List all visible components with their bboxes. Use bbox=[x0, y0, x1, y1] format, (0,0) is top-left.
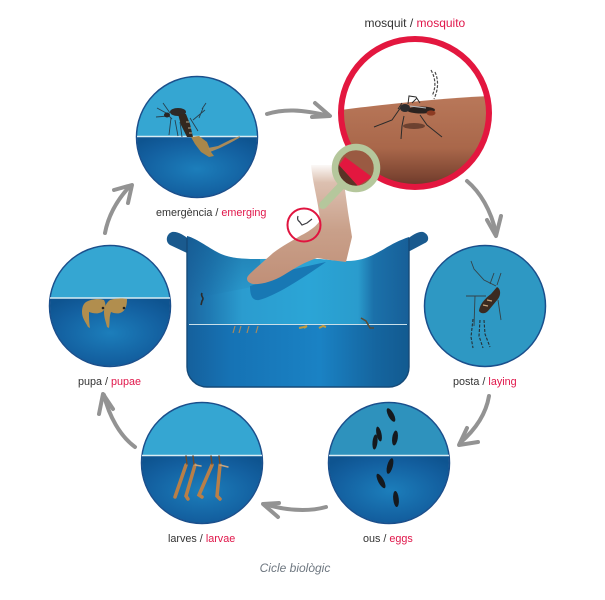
icon: small magnifier circle bbox=[288, 208, 320, 242]
panel: water tub bbox=[167, 232, 428, 387]
icon: pupae bbox=[82, 298, 127, 328]
finger shadow bbox=[250, 262, 326, 300]
water surface line bbox=[189, 324, 407, 326]
panel: laying circle bbox=[424, 246, 546, 366]
panel: eggs circle bbox=[325, 400, 455, 526]
icon: emerging mosquito bbox=[156, 103, 240, 157]
right handle bbox=[406, 232, 428, 252]
label: ous / eggs: ous / eggs bbox=[363, 533, 413, 545]
arrow: mosquito to laying bbox=[467, 181, 501, 236]
label: pupa / pupae: pupa / pupae bbox=[78, 376, 141, 388]
icon: hand with finger in water bbox=[247, 165, 352, 284]
icon: magnifying glass bbox=[323, 147, 377, 205]
arrow: eggs to larvae bbox=[263, 503, 326, 517]
tub top shading bbox=[187, 236, 262, 300]
heading: mosquit / mosquito: mosquit / mosquito bbox=[364, 16, 466, 30]
panel: larvae circle bbox=[140, 402, 264, 524]
icon: biting mosquito bbox=[374, 70, 442, 139]
arrow: larvae to pupae bbox=[99, 394, 135, 447]
caption: Cicle biològic bbox=[260, 561, 330, 575]
icon: egg-laying mosquito bbox=[466, 261, 501, 348]
arrow: pupae to emerging bbox=[105, 185, 132, 233]
tub lower water bbox=[187, 324, 409, 387]
label: posta / laying: posta / laying bbox=[453, 376, 517, 388]
panel: mosquito on skin circle bbox=[340, 38, 490, 191]
icon: larvae bbox=[175, 456, 228, 499]
tub larvae, pupae and mosquitoes bbox=[201, 293, 374, 333]
label: emergència / emerging: emergència / emerging bbox=[156, 207, 266, 219]
label: larves / larvae: larves / larvae bbox=[168, 533, 235, 545]
left handle bbox=[167, 232, 190, 253]
panel: emerging circle bbox=[136, 76, 258, 198]
icon: eggs bbox=[372, 407, 400, 507]
arrow: laying to eggs bbox=[459, 396, 489, 445]
panel: pupae circle bbox=[45, 240, 175, 368]
tub upper water bbox=[187, 236, 409, 326]
arrow: emerging to mosquito bbox=[267, 103, 330, 117]
